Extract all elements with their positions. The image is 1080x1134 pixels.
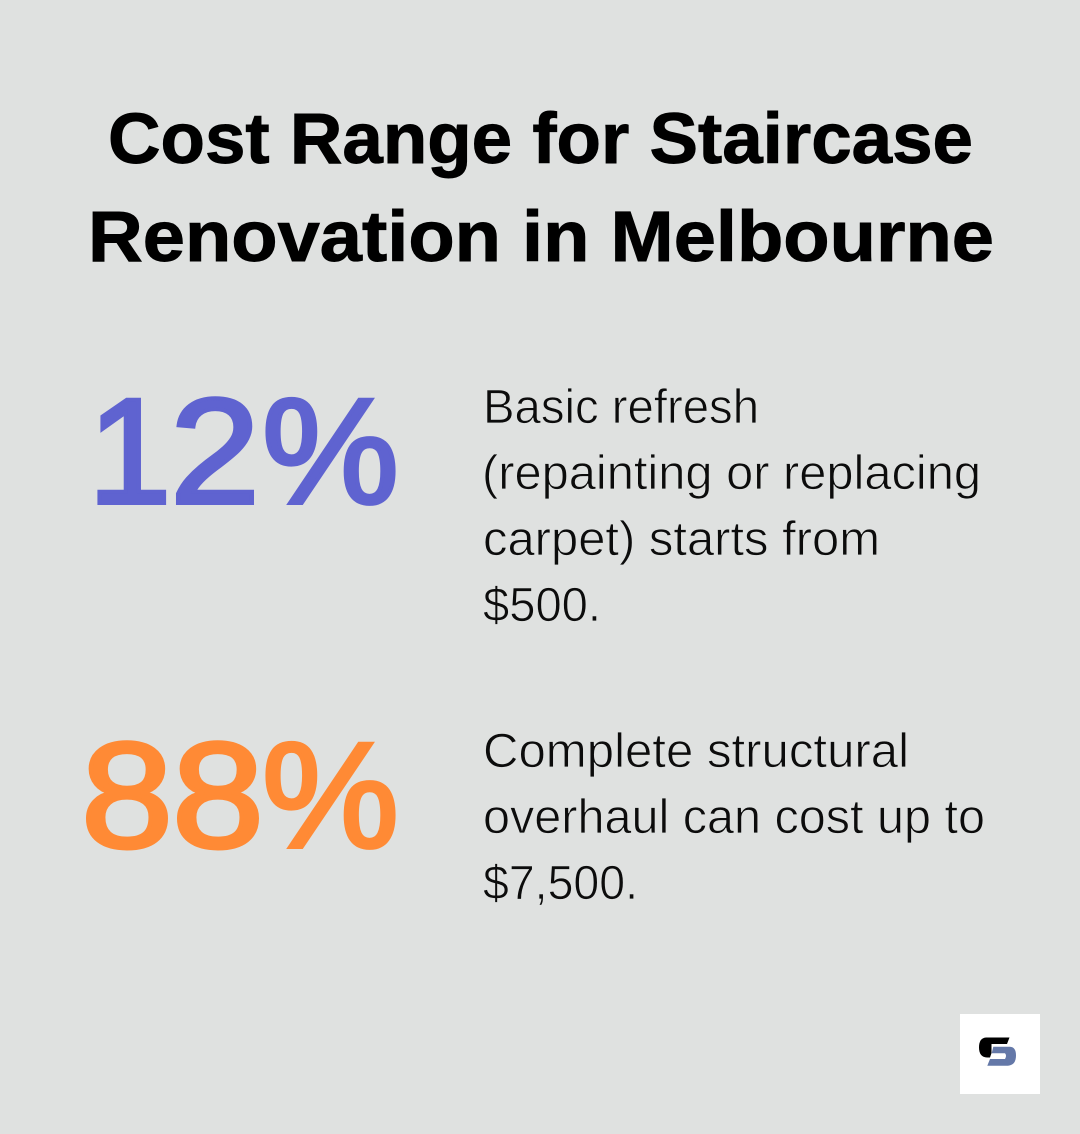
icon: logo [960, 1014, 1040, 1094]
text block: basic refresh: (repainting or replacing [482, 447, 981, 500]
text block: structural overhaul: Complete structural [483, 725, 909, 778]
stat: 12 percent: % [262, 367, 399, 535]
title [88, 100, 994, 277]
stat: 12 percent: 2 [170, 367, 260, 535]
text block: structural overhaul: overhaul can cost up to [483, 791, 985, 844]
title: Renovation in Melbourne [88, 198, 994, 277]
stat: 88 percent: 8 [81, 711, 173, 879]
stat: 88 percent: % [262, 711, 399, 879]
stat: 12 percent: 1 [88, 367, 171, 535]
text block: structural overhaul [483, 725, 985, 910]
text block: structural overhaul: $7,500. [483, 857, 638, 910]
stat: 88 percent: 8 [172, 711, 264, 879]
text block: basic refresh [482, 381, 981, 632]
text block: basic refresh: $500. [483, 579, 601, 632]
text block: basic refresh: carpet) starts from [483, 513, 880, 566]
stat: 88 percent [81, 711, 399, 879]
title: Cost Range for Staircase [108, 100, 973, 179]
text block: basic refresh: Basic refresh [483, 381, 759, 434]
stat: 12 percent [88, 367, 399, 535]
